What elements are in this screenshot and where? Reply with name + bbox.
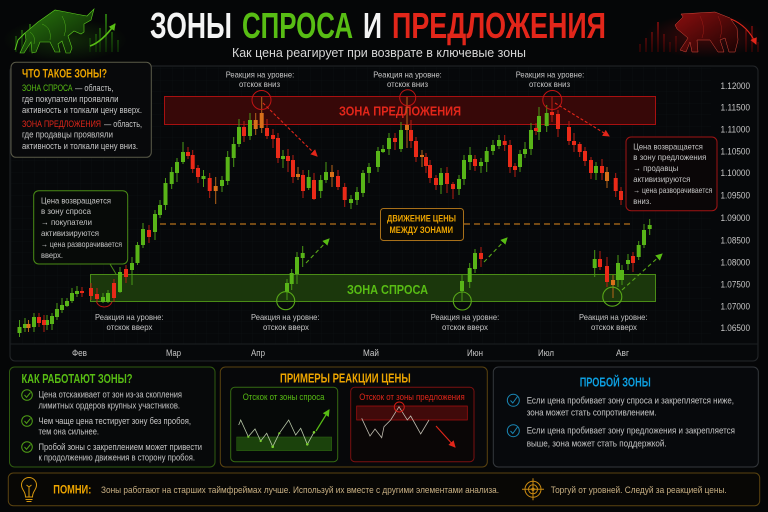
callout: demand zone note: активизируются <box>41 228 99 238</box>
callout: supply zone note: → цена разворачивается <box>633 185 713 195</box>
example: supply bounce <box>351 387 474 462</box>
callout: movement between zones: МЕЖДУ ЗОНАМИ <box>390 225 453 236</box>
axis prices: 1.10500 <box>720 146 750 156</box>
title: И <box>363 5 382 46</box>
axis months: Авг <box>616 348 630 358</box>
callout: supply zone note: Цена возвращается <box>633 141 703 151</box>
callout: demand zone note: → покупатели <box>41 217 92 227</box>
labels: demand reactions: отскок вверх <box>106 322 153 332</box>
icons: blue checks <box>507 394 519 437</box>
axis prices: 1.07500 <box>720 280 750 290</box>
title: ПРЕДЛОЖЕНИЯ <box>392 5 606 46</box>
icon: green bull <box>3 9 127 62</box>
example: demand bounce: Отскок от зоны спроса <box>243 392 324 402</box>
demand zone <box>90 274 656 302</box>
panel: zone breakout: Если цена пробивает зону предложения и закрепляется <box>527 426 735 436</box>
callout: supply zone note: в зону предложения <box>633 152 707 162</box>
axis prices: 1.12000 <box>720 81 750 91</box>
labels: supply reactions <box>226 69 584 89</box>
axis prices: 1.08500 <box>720 236 750 246</box>
panel: zone breakout: ПРОБОЙ ЗОНЫ <box>580 375 651 390</box>
axis prices: 1.06500 <box>720 323 750 333</box>
panel: what are zones <box>11 62 151 157</box>
callout: supply zone note <box>626 137 717 211</box>
labels: demand reactions <box>95 312 648 332</box>
callout: demand zone note <box>34 191 128 274</box>
labels: demand reactions: отскок вверх <box>263 322 310 332</box>
reaction circles: demand <box>277 287 622 310</box>
axis prices: 1.11000 <box>720 124 750 134</box>
labels: demand reactions: Реакция на уровне: <box>579 312 648 322</box>
labels: demand reactions: Реакция на уровне: <box>95 312 164 322</box>
title: СПРОСА <box>242 5 353 46</box>
labels: supply reactions: Реакция на уровне: <box>226 69 294 79</box>
panel: what are zones: где продавцы проявляли <box>22 130 113 140</box>
panel: what are zones: активность и толкали цену вверх. <box>22 105 142 115</box>
axis prices <box>720 81 750 333</box>
example: supply bounce: Отскок от зоны предложения <box>359 392 465 402</box>
panel: remember bar <box>8 473 760 506</box>
panel: remember bar: Зоны работают на старших таймфреймах лучше. Используй их вместе с другими элементами анализа. <box>101 485 499 495</box>
panel: what are zones: ЗОНА СПРОСА <box>22 83 73 93</box>
axis months: Фев <box>72 348 87 358</box>
callout: supply zone note: → продавцы <box>633 163 678 173</box>
panel: what are zones: ЧТО ТАКОЕ ЗОНЫ? <box>22 68 107 80</box>
labels: supply reactions: отскок вниз <box>387 79 428 89</box>
panel: how zones work: лимитных ордеров крупных участников. <box>38 400 180 410</box>
callout: movement between zones <box>380 208 464 240</box>
panel: how zones work: Пробой зоны с закреплением может привести <box>38 442 202 452</box>
panel: how zones work: тем она сильнее. <box>38 426 99 436</box>
labels: supply reactions: Реакция на уровне: <box>516 69 584 79</box>
panel: remember bar: Торгуй от уровней. Следуй за реакцией цены. <box>551 485 727 495</box>
callout: supply zone note: вниз. <box>633 196 651 206</box>
axis months: Июн <box>467 348 483 358</box>
callout: supply zone note: активизируются <box>633 174 691 184</box>
callout: movement between zones: ДВИЖЕНИЕ ЦЕНЫ <box>387 214 456 225</box>
axis prices: 1.09500 <box>720 190 750 200</box>
panel: how zones work: КАК РАБОТАЮТ ЗОНЫ? <box>22 372 132 386</box>
panel: zone breakout <box>493 367 758 467</box>
axis months: Апр <box>251 348 265 358</box>
supply zone: ЗОНА ПРЕДЛОЖЕНИЯ <box>339 104 461 119</box>
axis months: Май <box>363 348 379 358</box>
icon: red bear <box>640 12 765 58</box>
panel: reaction examples: ПРИМЕРЫ РЕАКЦИИ ЦЕНЫ <box>280 372 411 386</box>
supply zone <box>164 96 656 124</box>
arrows: down from supply <box>263 103 609 156</box>
callout: demand zone note: вверх. <box>41 250 63 260</box>
subtitle: Как цена реагирует при возврате в ключевые зоны <box>232 45 526 60</box>
labels: supply reactions: отскок вниз <box>239 79 280 89</box>
panel: how zones work: Цена отскакивает от зон из-за скопления <box>38 390 182 400</box>
axis prices: 1.11500 <box>720 102 750 112</box>
axis prices: 1.09000 <box>720 213 750 223</box>
reaction circles: supply <box>96 90 562 307</box>
panel: what are zones: ЗОНА ПРЕДЛОЖЕНИЯ <box>22 119 101 129</box>
labels: demand reactions: отскок вверх <box>591 322 638 332</box>
callout: demand zone note: → цена разворачивается <box>41 239 122 249</box>
arrows: up from demand <box>306 238 662 290</box>
panel: reaction examples <box>220 367 487 467</box>
panel: what are zones: — область, <box>104 119 142 129</box>
panel: how zones work <box>10 367 215 467</box>
labels: demand reactions: отскок вверх <box>442 322 489 332</box>
axis months <box>72 348 630 358</box>
title: ЗОНЫ <box>150 5 232 46</box>
demand zone: ЗОНА СПРОСА <box>347 282 429 297</box>
example: demand bounce <box>231 387 338 462</box>
panel: how zones work: Чем чаще цена тестирует зону без пробоя, <box>38 416 191 426</box>
callout: demand zone note: в зону спроса <box>41 206 91 216</box>
panel: what are zones: — область, <box>75 83 114 93</box>
panel: how zones work: к продолжению движения в сторону пробоя. <box>38 453 195 463</box>
panel: zone breakout: Если цена пробивает зону спроса и закрепляется ниже, <box>527 395 734 405</box>
axis months: Мар <box>166 348 181 358</box>
icons: checks <box>22 390 32 452</box>
candlesticks <box>20 97 650 337</box>
axis prices: 1.07000 <box>720 302 750 312</box>
panel: what are zones: где покупатели проявляли <box>22 94 119 104</box>
title <box>150 5 606 46</box>
axis prices: 1.10000 <box>720 168 750 178</box>
callout: demand zone note: Цена возвращается <box>41 195 111 205</box>
labels: supply reactions: отскок вниз <box>529 79 570 89</box>
dashed mid line <box>160 223 630 225</box>
icon: target <box>522 478 544 500</box>
panel: what are zones: активность и толкали цену вниз. <box>22 141 138 151</box>
axis prices: 1.08000 <box>720 258 750 268</box>
icon: light bulb <box>22 478 36 502</box>
labels: demand reactions: Реакция на уровне: <box>431 312 499 322</box>
labels: demand reactions: Реакция на уровне: <box>251 312 320 322</box>
panel: remember bar: ПОМНИ: <box>53 484 91 496</box>
panel: price chart <box>10 66 758 361</box>
labels: supply reactions: Реакция на уровне: <box>373 69 442 79</box>
axis months: Июл <box>538 348 554 358</box>
panel: zone breakout: зона может стать сопротивлением. <box>527 407 657 417</box>
panel: zone breakout: выше, зона может стать поддержкой. <box>527 438 667 448</box>
